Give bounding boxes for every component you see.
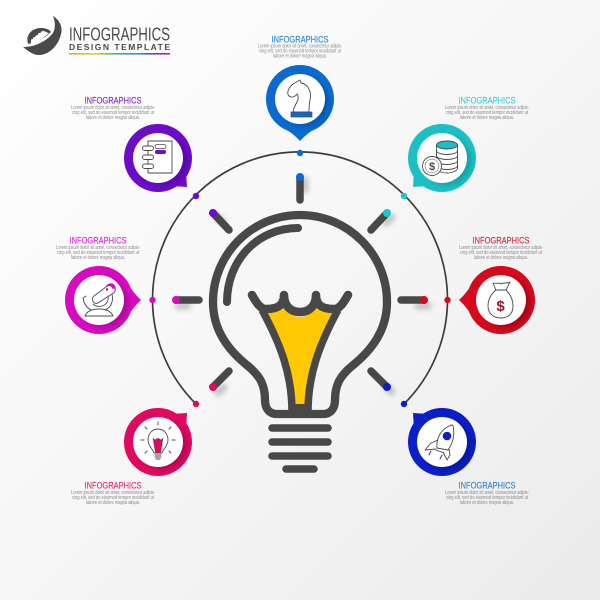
- central light bulb: [213, 215, 387, 469]
- icon: coins: $: [429, 161, 435, 173]
- icon: money bag: $: [496, 298, 505, 315]
- right text block: cing elit, sed do eiusmod tempor incididunt ut: [460, 250, 542, 256]
- filament stems: [262, 310, 338, 412]
- logo: [23, 16, 170, 55]
- arc dots: [149, 150, 451, 407]
- right text block: labore et dolore magna aliqua.: [474, 255, 528, 261]
- right marker: [459, 266, 535, 334]
- icon: rocket: [425, 425, 454, 460]
- panel: right money bag: [459, 236, 543, 334]
- top marker: [266, 65, 334, 141]
- upper right text block: cing elit, sed do eiusmod tempor incididunt ut: [446, 110, 528, 116]
- panel: lower right rocket: [408, 408, 529, 506]
- top heading: INFOGRAPHICS: [272, 34, 328, 46]
- panel: upper right coins: [408, 96, 529, 192]
- bulb rays: [172, 173, 428, 393]
- lower right text block: labore et dolore magna aliqua.: [460, 500, 514, 506]
- lower left heading: INFOGRAPHICS: [84, 480, 142, 492]
- panel: lower left bulb: [71, 408, 192, 506]
- upper right text block: Lorem ipsum dolor sit amet, consectetur adipis-: [445, 105, 529, 111]
- upper left text block: labore et dolore magna aliqua.: [86, 115, 140, 121]
- upper right text block: labore et dolore magna aliqua.: [460, 115, 514, 121]
- logo title: INFOGRAPHICS: [69, 25, 170, 45]
- filament crown: [252, 295, 348, 312]
- top text block: labore et dolore magna aliqua.: [273, 54, 327, 60]
- right text block: Lorem ipsum dolor sit amet, consectetur adipis-: [459, 245, 543, 251]
- left text block: labore et dolore magna aliqua.: [71, 255, 125, 261]
- upper left heading: INFOGRAPHICS: [84, 96, 142, 106]
- panel: left microscope: [56, 236, 141, 334]
- left heading: INFOGRAPHICS: [70, 236, 126, 246]
- icon: microscope: [83, 284, 115, 316]
- top text block: Lorem ipsum dolor sit amet, consectetur adipis-: [258, 44, 342, 50]
- top text block: [258, 44, 342, 60]
- lower left marker: [124, 408, 192, 476]
- lower right marker: [408, 408, 476, 476]
- left text block: cing elit, sed do eiusmod tempor incididunt ut: [57, 250, 139, 256]
- connector arc: [152, 152, 448, 404]
- right heading: INFOGRAPHICS: [472, 236, 530, 246]
- upper right marker: [408, 124, 476, 192]
- lower right text block: [445, 490, 529, 506]
- bulb glass outline: [213, 215, 387, 414]
- panel: top knight: [258, 34, 342, 141]
- logo subtitle: DESIGN TEMPLATE: [69, 42, 170, 52]
- left text block: [56, 245, 140, 261]
- icon: chess knight: [288, 80, 312, 117]
- icon: small bulb: [141, 422, 175, 459]
- lower right text block: cing elit, sed do eiusmod tempor incididunt ut: [446, 495, 528, 501]
- lower left text block: cing elit, sed do eiusmod tempor incididunt ut: [72, 495, 154, 501]
- upper right heading: INFOGRAPHICS: [458, 96, 516, 106]
- lower left text block: Lorem ipsum dolor sit amet, consectetur adipis-: [71, 490, 155, 496]
- bulb highlight: [227, 228, 298, 302]
- lower right heading: INFOGRAPHICS: [458, 480, 516, 492]
- upper left text block: [71, 105, 155, 121]
- icon: notebook: [142, 141, 172, 173]
- bulb filament fill: [268, 306, 332, 405]
- upper left text block: cing elit, sed do eiusmod tempor incididunt ut: [72, 110, 154, 116]
- panel: upper left notebook: [71, 96, 192, 192]
- bulb base: [272, 428, 328, 469]
- upper left marker: [124, 124, 192, 192]
- left marker: [65, 266, 141, 334]
- lower right text block: Lorem ipsum dolor sit amet, consectetur adipis-: [445, 490, 529, 496]
- lower left text block: labore et dolore magna aliqua.: [86, 500, 140, 506]
- top text block: cing elit, sed do eiusmod tempor incididunt ut: [259, 48, 341, 54]
- lower left text block: [71, 490, 155, 506]
- upper right text block: [445, 105, 529, 121]
- left text block: Lorem ipsum dolor sit amet, consectetur adipis-: [56, 245, 140, 251]
- upper left text block: Lorem ipsum dolor sit amet, consectetur adipis-: [71, 105, 155, 111]
- rainbow underline: [69, 53, 170, 55]
- logo icon: [23, 16, 62, 55]
- right text block: [459, 245, 543, 261]
